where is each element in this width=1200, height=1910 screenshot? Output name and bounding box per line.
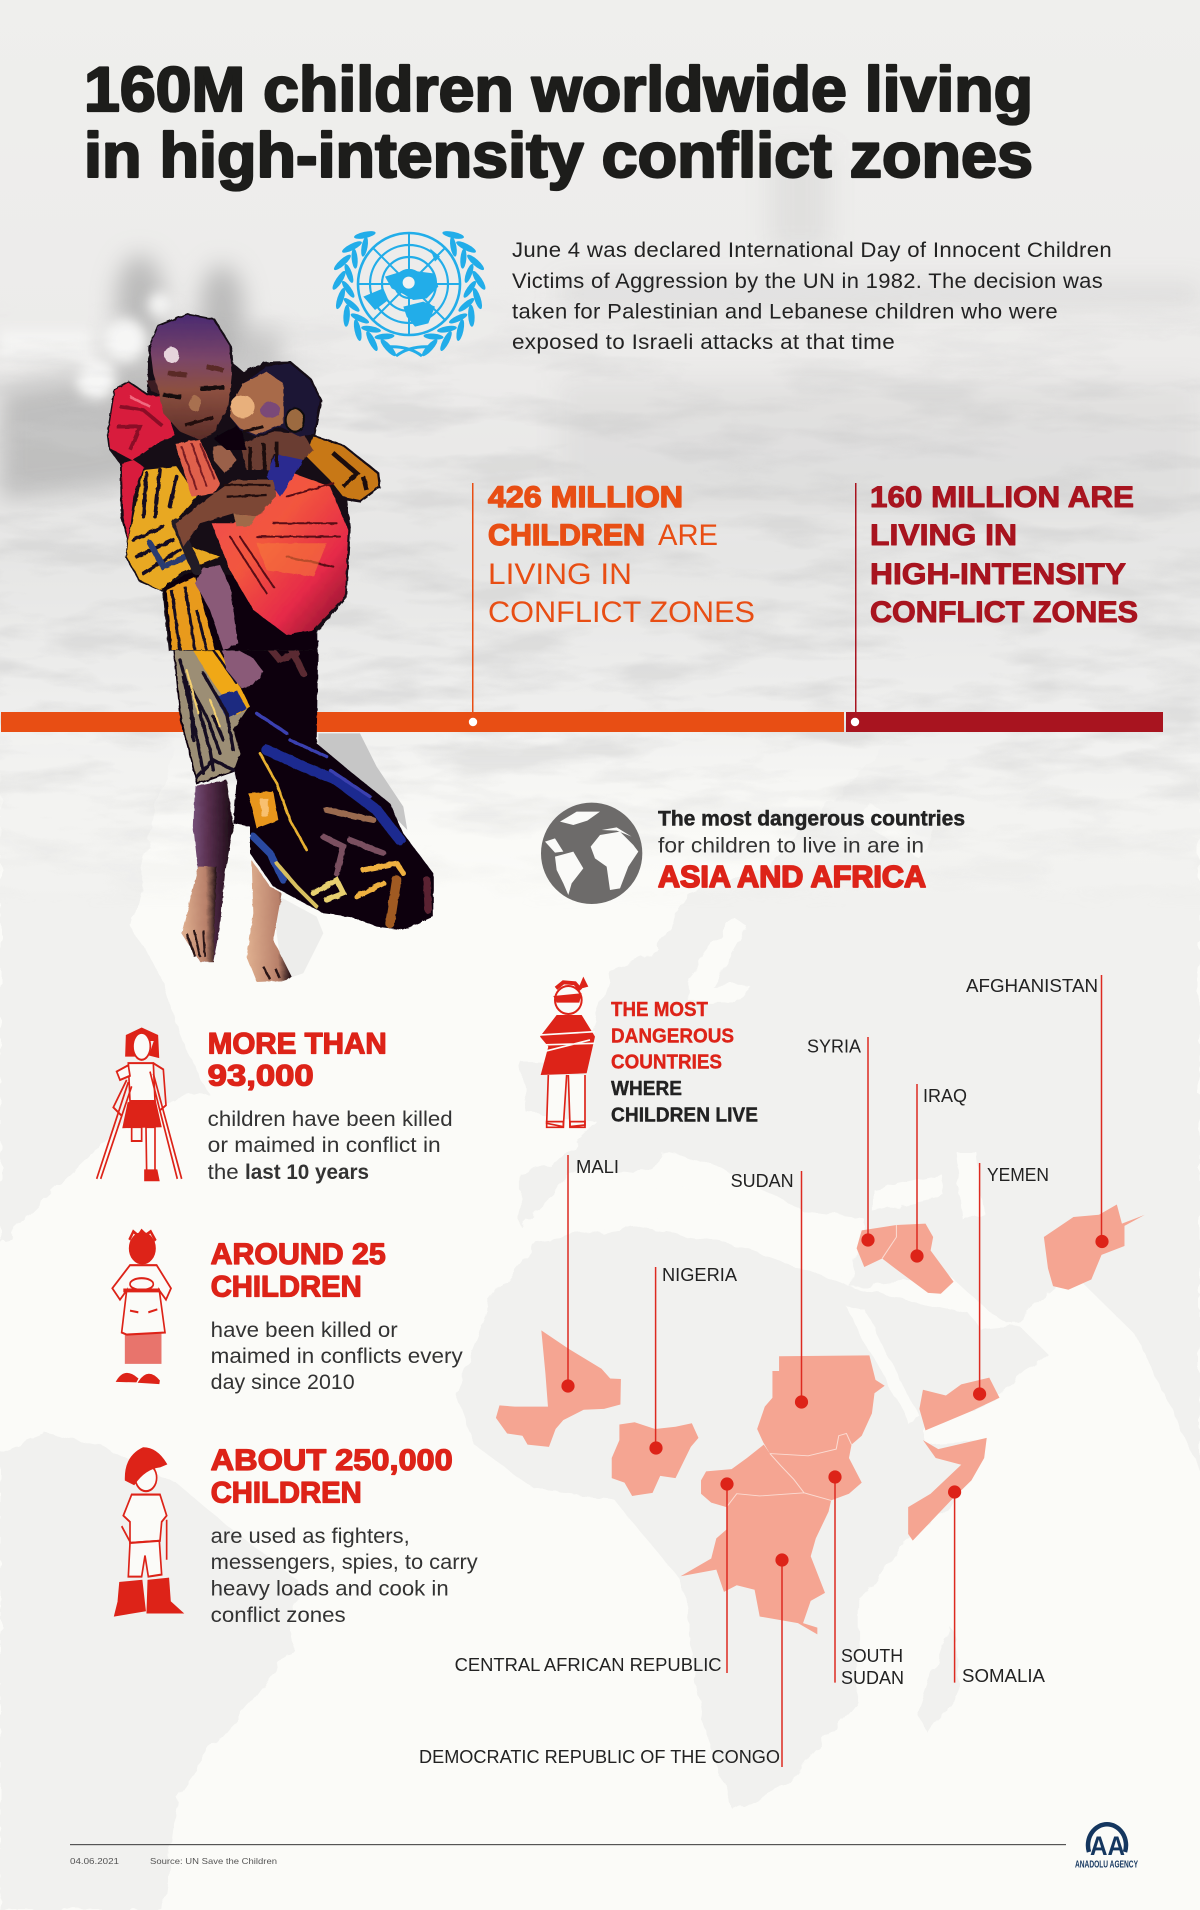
country: Central African Republic xyxy=(701,1445,804,1507)
pin: Mali: MALI xyxy=(576,1156,619,1177)
lower body: legs and skirt xyxy=(170,640,433,982)
icon: child with plate xyxy=(112,1231,171,1383)
heading: most dangerous countries: The most dangerous countries xyxy=(658,807,965,831)
map labels and pins xyxy=(419,975,1109,1767)
panel: stat 93,000: last 10 years xyxy=(245,1161,369,1184)
intro text: Victims of Aggression by the UN in 1982. The decision was xyxy=(512,270,1103,293)
icon: UN emblem xyxy=(330,230,488,358)
panel: stat around 25: AROUND 25 xyxy=(211,1238,386,1271)
heading: country list xyxy=(611,998,758,1127)
pin: Yemen xyxy=(973,1163,1049,1401)
footer: 04.06.2021 xyxy=(70,1856,119,1866)
panel: stat about 250,000: conflict zones xyxy=(211,1604,346,1627)
pin: Syria: SYRIA xyxy=(807,1036,862,1057)
panel: stat about 250,000: are used as fighters, xyxy=(211,1525,410,1548)
panel: stat 93,000: children have been killed xyxy=(208,1108,453,1131)
panel: stat about 250,000: CHILDREN xyxy=(211,1476,362,1510)
pin: Central African Republic xyxy=(455,1477,734,1675)
intro text: June 4 was declared International Day of Innocent Children xyxy=(512,239,1112,262)
heading: most dangerous countries: ASIA AND AFRICA xyxy=(658,859,926,894)
pin: DR Congo xyxy=(419,1553,789,1767)
panel: stat about 250,000: ABOUT 250,000 xyxy=(211,1444,453,1477)
country: Iraq xyxy=(882,1224,954,1294)
icon: child soldier xyxy=(115,1448,182,1615)
pin: Iraq: IRAQ xyxy=(923,1085,967,1106)
pin: Nigeria: NIGERIA xyxy=(662,1264,738,1285)
panel: stat about 250,000 xyxy=(115,1444,478,1627)
callout: 426 million xyxy=(472,481,755,715)
title: in high-intensity conflict zones xyxy=(84,121,1033,191)
title: 160M children worldwide living xyxy=(84,55,1033,125)
panel: stat 93,000: the xyxy=(208,1161,239,1184)
upper body: heads and sling xyxy=(107,313,381,651)
callout: 426 million: LIVING IN xyxy=(488,558,632,591)
pin: Sudan xyxy=(731,1170,808,1409)
country: Nigeria xyxy=(612,1422,698,1496)
pin: Central African Republic: CENTRAL AFRICAN REPUBLIC xyxy=(455,1654,722,1675)
country: Somalia xyxy=(908,1438,987,1541)
callout: 426 million: CHILDREN xyxy=(488,519,645,552)
pin: Syria xyxy=(807,1036,875,1247)
pin: Afghanistan xyxy=(966,975,1109,1248)
map: highlighted countries xyxy=(496,1204,1145,1634)
callout: 426 million: CONFLICT ZONES xyxy=(488,596,755,629)
footer xyxy=(70,1844,1066,1866)
country: South Sudan xyxy=(770,1433,862,1500)
panel: stat 93,000: or maimed in conflict in xyxy=(208,1134,441,1157)
background: light blobs xyxy=(0,293,172,400)
panel: stat around 25: maimed in conflicts every xyxy=(211,1345,463,1368)
pin: Afghanistan: AFGHANISTAN xyxy=(966,975,1098,996)
country: Yemen xyxy=(919,1378,999,1430)
illustration: child carrying baby xyxy=(107,313,433,982)
background: photo fade xyxy=(0,0,1200,900)
pin: South Sudan: SUDAN xyxy=(841,1667,904,1688)
country: Syria xyxy=(857,1225,896,1267)
pin: DR Congo: DEMOCRATIC REPUBLIC OF THE CONGO xyxy=(419,1746,780,1767)
background: blurred figures xyxy=(0,150,1200,510)
panel: stat around 25: have been killed or xyxy=(211,1319,398,1342)
icon: blindfolded child xyxy=(540,977,595,1127)
callout: 160 million: LIVING IN xyxy=(870,519,1017,552)
pin: Nigeria xyxy=(649,1264,738,1455)
panel: stat around 25 xyxy=(112,1231,463,1394)
intro text: taken for Palestinian and Lebanese children who were xyxy=(512,300,1058,324)
heading: most dangerous countries xyxy=(658,807,965,894)
callout: 160 million: CONFLICT ZONES xyxy=(870,596,1138,629)
pin: South Sudan xyxy=(828,1470,904,1688)
pin: South Sudan: SOUTH xyxy=(841,1645,903,1666)
callout: 426 million: 426 MILLION xyxy=(488,481,683,514)
pin: Somalia xyxy=(948,1485,1046,1686)
pin: Yemen: YEMEN xyxy=(987,1164,1049,1185)
icon: globe xyxy=(541,803,642,904)
callout: 160 million: 160 MILLION ARE xyxy=(870,481,1134,514)
heading: country list: THE MOST xyxy=(611,998,708,1021)
panel: stat 93,000: MORE THAN xyxy=(208,1028,387,1060)
background: water texture xyxy=(0,358,1200,842)
pin: Iraq xyxy=(910,1084,967,1263)
heading: country list: COUNTRIES xyxy=(611,1051,722,1074)
logo: Anadolu Agency xyxy=(1075,1824,1138,1871)
panel: stat about 250,000: heavy loads and cook in xyxy=(211,1578,449,1600)
heading: country list: CHILDREN LIVE xyxy=(611,1104,758,1127)
heading: country list: WHERE xyxy=(611,1077,682,1100)
footer: Source: UN Save the Children xyxy=(150,1856,277,1866)
pin: Somalia: SOMALIA xyxy=(962,1665,1046,1686)
country: Sudan xyxy=(757,1355,885,1456)
background: world map xyxy=(0,730,1200,1910)
panel: stat around 25: CHILDREN xyxy=(211,1271,362,1304)
heading: country list: DANGEROUS xyxy=(611,1025,734,1048)
panel: stat around 25: day since 2010 xyxy=(211,1371,355,1394)
country: Afghanistan xyxy=(1044,1204,1145,1290)
intro text xyxy=(512,239,1112,354)
callout: 160 million: HIGH-INTENSITY xyxy=(870,558,1126,591)
country: Mali xyxy=(496,1330,621,1447)
intro text: exposed to Israeli attacks at that time xyxy=(512,331,895,354)
heading: most dangerous countries: for children to live in are in xyxy=(658,834,924,858)
country borders xyxy=(727,1225,896,1507)
logo: Anadolu Agency: AA xyxy=(1090,1831,1125,1861)
panel: stat 93,000: 93,000 xyxy=(208,1059,314,1092)
panel: stat 93,000 xyxy=(97,1028,453,1184)
icon: child on crutches xyxy=(97,1029,182,1180)
callout: 160 million xyxy=(855,481,1138,715)
callout: 426 million: ARE xyxy=(658,519,718,552)
panel: stat about 250,000: messengers, spies, to carry xyxy=(211,1551,478,1574)
country: DR Congo xyxy=(681,1493,831,1634)
timeline bar xyxy=(1,712,1163,732)
pin: Mali xyxy=(561,1155,619,1393)
title xyxy=(84,55,1033,191)
logo: Anadolu Agency: ANADOLU AGENCY xyxy=(1075,1860,1138,1871)
pin: Sudan: SUDAN xyxy=(731,1170,794,1191)
